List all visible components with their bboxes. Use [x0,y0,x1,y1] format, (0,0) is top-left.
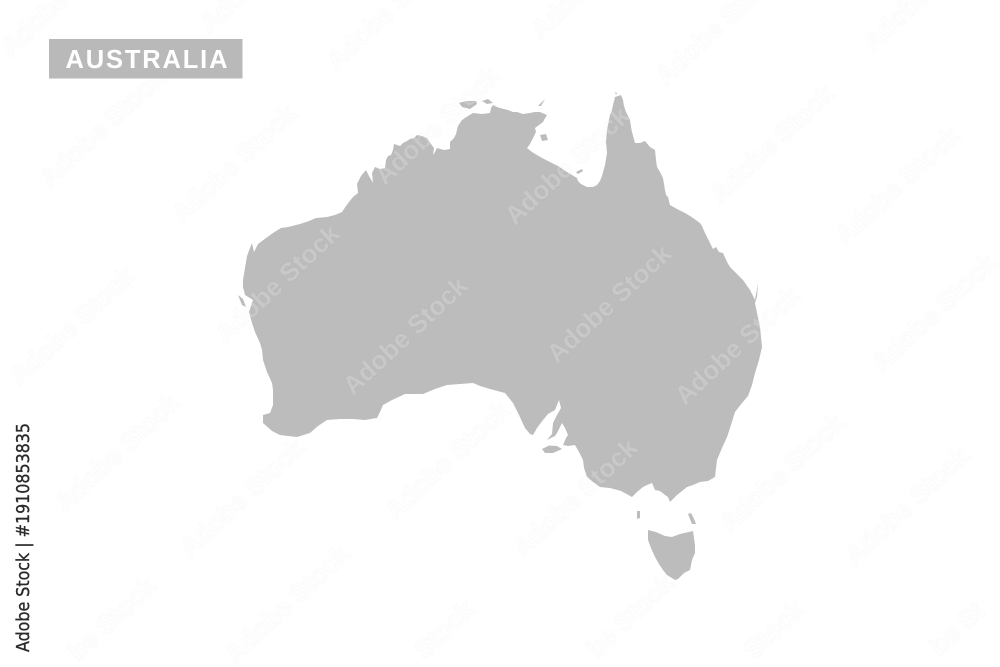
Cape York islet [615,92,617,95]
watermark pattern: Adobe Stock [541,238,678,369]
Bathurst coast islets [482,99,493,104]
watermark pattern: Adobe Stock [379,395,516,526]
watermark pattern: Adobe Stock [839,440,976,571]
watermark pattern: Adobe Stock [829,120,966,251]
watermark pattern: Adobe Stock [219,538,356,667]
watermark pattern: Adobe Stock [704,78,841,209]
watermark pattern: be Stock [580,567,680,663]
watermark pattern: Adobe Stock [4,260,141,391]
map: Australia [238,92,762,580]
Shark Bay islands [238,295,246,307]
image id credit: Adobe Stock | #1910853835 [14,423,34,652]
Flinders Island [688,513,696,524]
Groote Eylandt [540,134,548,141]
King Island [637,511,640,519]
mainland [243,95,762,502]
watermark pattern: Adobe Stock [714,407,851,538]
watermark pattern: Adobe Stock [166,98,303,229]
watermark pattern: be St [923,596,991,661]
title banner: AUSTRALIA [66,46,228,74]
watermark pattern: Adobe Stock [49,387,186,518]
watermark pattern: Adobe Stock [209,218,346,349]
watermark pattern: Adobe Stock [866,247,1000,378]
Kangaroo Island [542,446,562,453]
watermark pattern: Adobe Stock [499,100,636,231]
Melville spit [538,99,545,106]
watermark pattern: Adobe Stock [174,432,311,563]
title banner [49,39,242,78]
watermark pattern: Stock [738,594,810,665]
watermark pattern: Adobe Stock [507,432,644,563]
watermark pattern: Adobe Stock [369,60,506,191]
watermark pattern: Adobe Stock [669,280,806,411]
watermark pattern: Stock [408,594,480,665]
Mornington Island [576,169,583,174]
Tasmania [648,530,695,580]
Tiwi Islands [459,101,477,109]
watermark pattern: Adobe Stock [34,62,171,193]
watermark pattern: be Stock [62,570,162,666]
watermark pattern: Adobe Stock [337,270,474,401]
